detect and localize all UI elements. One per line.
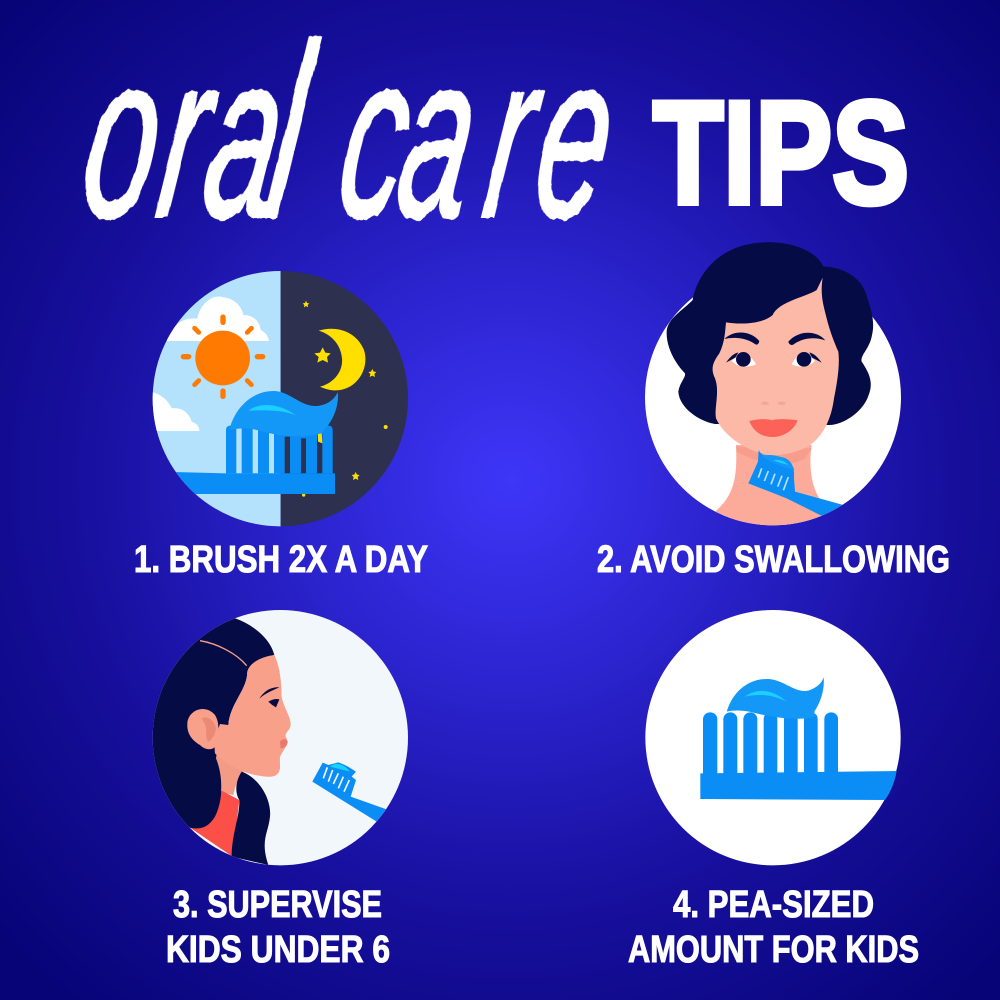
label 4: AMOUNT FOR KIDS	[628, 929, 919, 971]
ear	[187, 709, 218, 749]
label 4: 4. PEA-SIZED	[673, 884, 874, 926]
title: oral care brush script: e	[522, 7, 629, 265]
neck	[715, 445, 827, 528]
lips	[280, 739, 288, 748]
title: oral care brush script: l	[255, 0, 327, 269]
title: TIPS: TIPS	[653, 71, 909, 234]
title: oral care brush script: a	[385, 7, 492, 265]
eyes	[726, 352, 822, 367]
icon: toothbrush	[312, 762, 388, 822]
panel: pea-sized amount	[645, 610, 901, 865]
hair	[667, 242, 873, 425]
label 1: 1. BRUSH 2X A DAY	[134, 539, 428, 581]
title: oral care brush script: o	[71, 7, 178, 265]
icon: toothbrush	[173, 391, 338, 494]
panel: avoid swallowing	[645, 242, 901, 528]
eyebrows	[724, 332, 759, 345]
lips	[749, 419, 798, 437]
icon: moon and stars	[302, 301, 388, 497]
label 3: 3. SUPERVISE	[173, 884, 382, 926]
nose	[761, 402, 786, 405]
title: oral care brush script: r	[147, 7, 231, 265]
face	[713, 278, 839, 455]
label 3: KIDS UNDER 6	[166, 929, 390, 971]
eye	[259, 687, 279, 699]
title: oral care brush script: a	[192, 7, 299, 265]
icon: toothbrush	[700, 677, 897, 800]
title: oral care brush script: c	[326, 7, 426, 265]
label 3	[166, 884, 390, 971]
icon: toothbrush	[748, 450, 843, 517]
icon: sun	[181, 314, 265, 399]
neck and top	[216, 755, 244, 795]
title: oral care brush script: r	[473, 7, 557, 265]
panel: supervise kids	[147, 610, 408, 865]
long hair	[147, 610, 274, 828]
title	[70, 0, 909, 269]
label 4	[628, 884, 919, 971]
face	[215, 655, 291, 777]
panel: brush twice a day	[150, 270, 411, 530]
